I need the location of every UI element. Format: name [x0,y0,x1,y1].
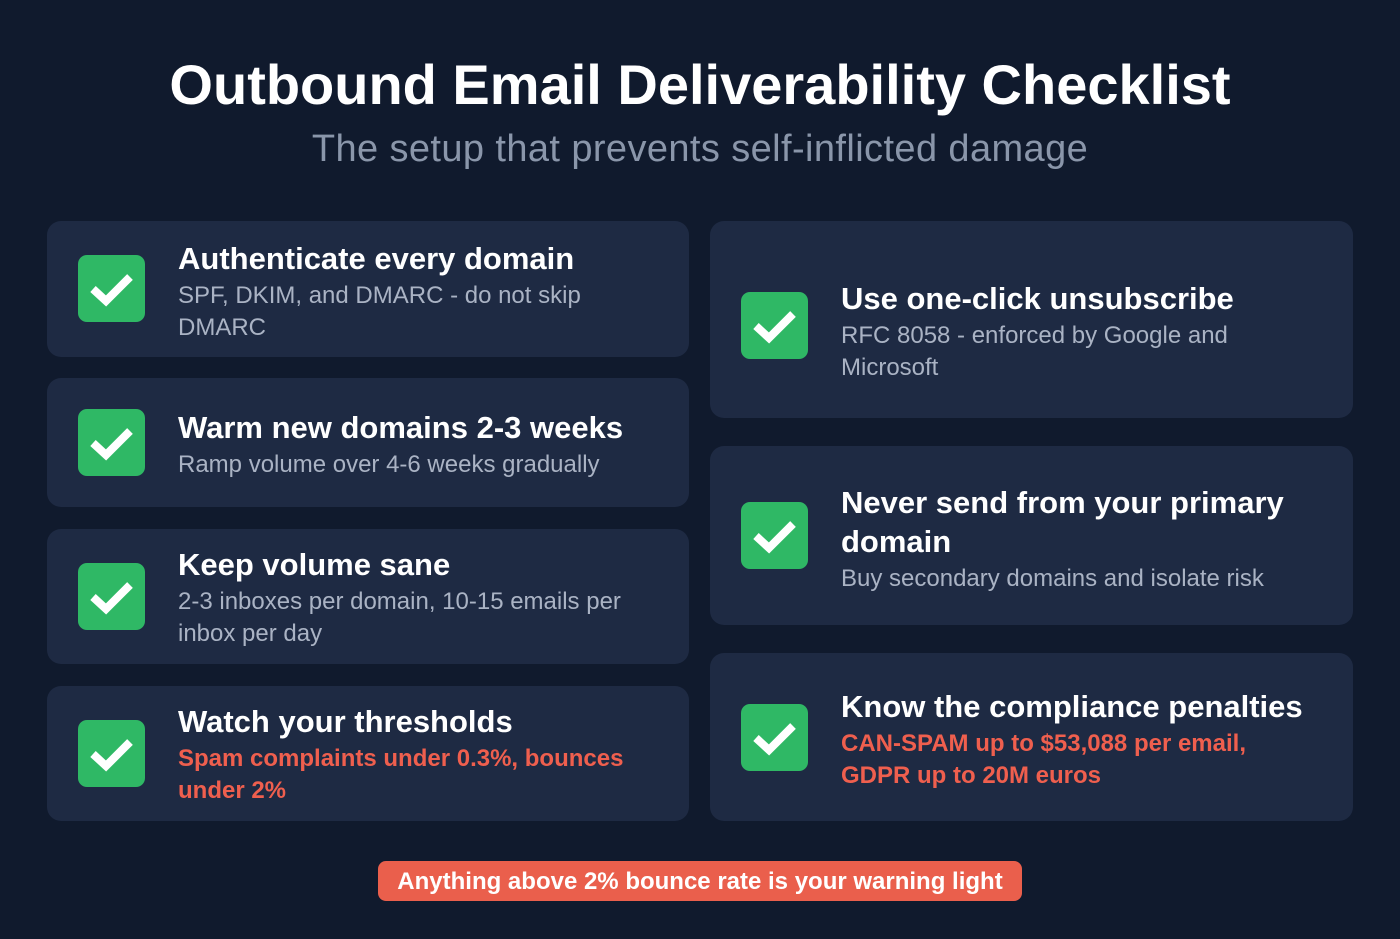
text: Ramp volume over 4-6 weeks gradually [178,451,600,478]
text: RFC 8058 - enforced by Google and [841,322,1228,349]
icon: check [741,704,808,771]
text [178,410,623,478]
text: domain [841,524,951,559]
card: authenticate [47,221,689,357]
card: thresholds [47,686,689,821]
text [178,241,581,341]
card: unsubscribe [710,221,1353,418]
text: Know the compliance penalties [841,689,1303,724]
text: Use one-click unsubscribe [841,281,1234,316]
text: Never send from your primary [841,485,1284,520]
text [841,485,1284,592]
text: Spam complaints under 0.3%, bounces [178,745,623,772]
text: SPF, DKIM, and DMARC - do not skip [178,282,581,309]
text: Authenticate every domain [178,241,574,276]
icon: check [78,563,145,630]
text: inbox per day [178,620,322,647]
card: volume [47,529,689,664]
title: Outbound Email Deliverability Checklist [169,53,1231,116]
text: Keep volume sane [178,547,450,582]
subtitle: The setup that prevents self-inflicted damage [312,128,1088,170]
icon: check [741,292,808,359]
icon: check [78,720,145,787]
card: primary domain [710,446,1353,625]
text: CAN-SPAM up to $53,088 per email, [841,730,1246,757]
text [178,704,623,804]
text: Watch your thresholds [178,704,513,739]
text: Microsoft [841,354,938,381]
card: warm [47,378,689,507]
card: compliance [710,653,1353,821]
callout banner [378,861,1022,901]
text [178,547,621,647]
text: 2-3 inboxes per domain, 10-15 emails per [178,588,621,615]
text [841,281,1234,381]
callout banner: Anything above 2% bounce rate is your warning light [397,868,1003,895]
text: Warm new domains 2-3 weeks [178,410,623,445]
icon: check [741,502,808,569]
text: Buy secondary domains and isolate risk [841,565,1264,592]
icon: check [78,255,145,322]
text: DMARC [178,314,266,341]
text: under 2% [178,777,286,804]
icon: check [78,409,145,476]
text [841,689,1303,789]
text: GDPR up to 20M euros [841,762,1101,789]
